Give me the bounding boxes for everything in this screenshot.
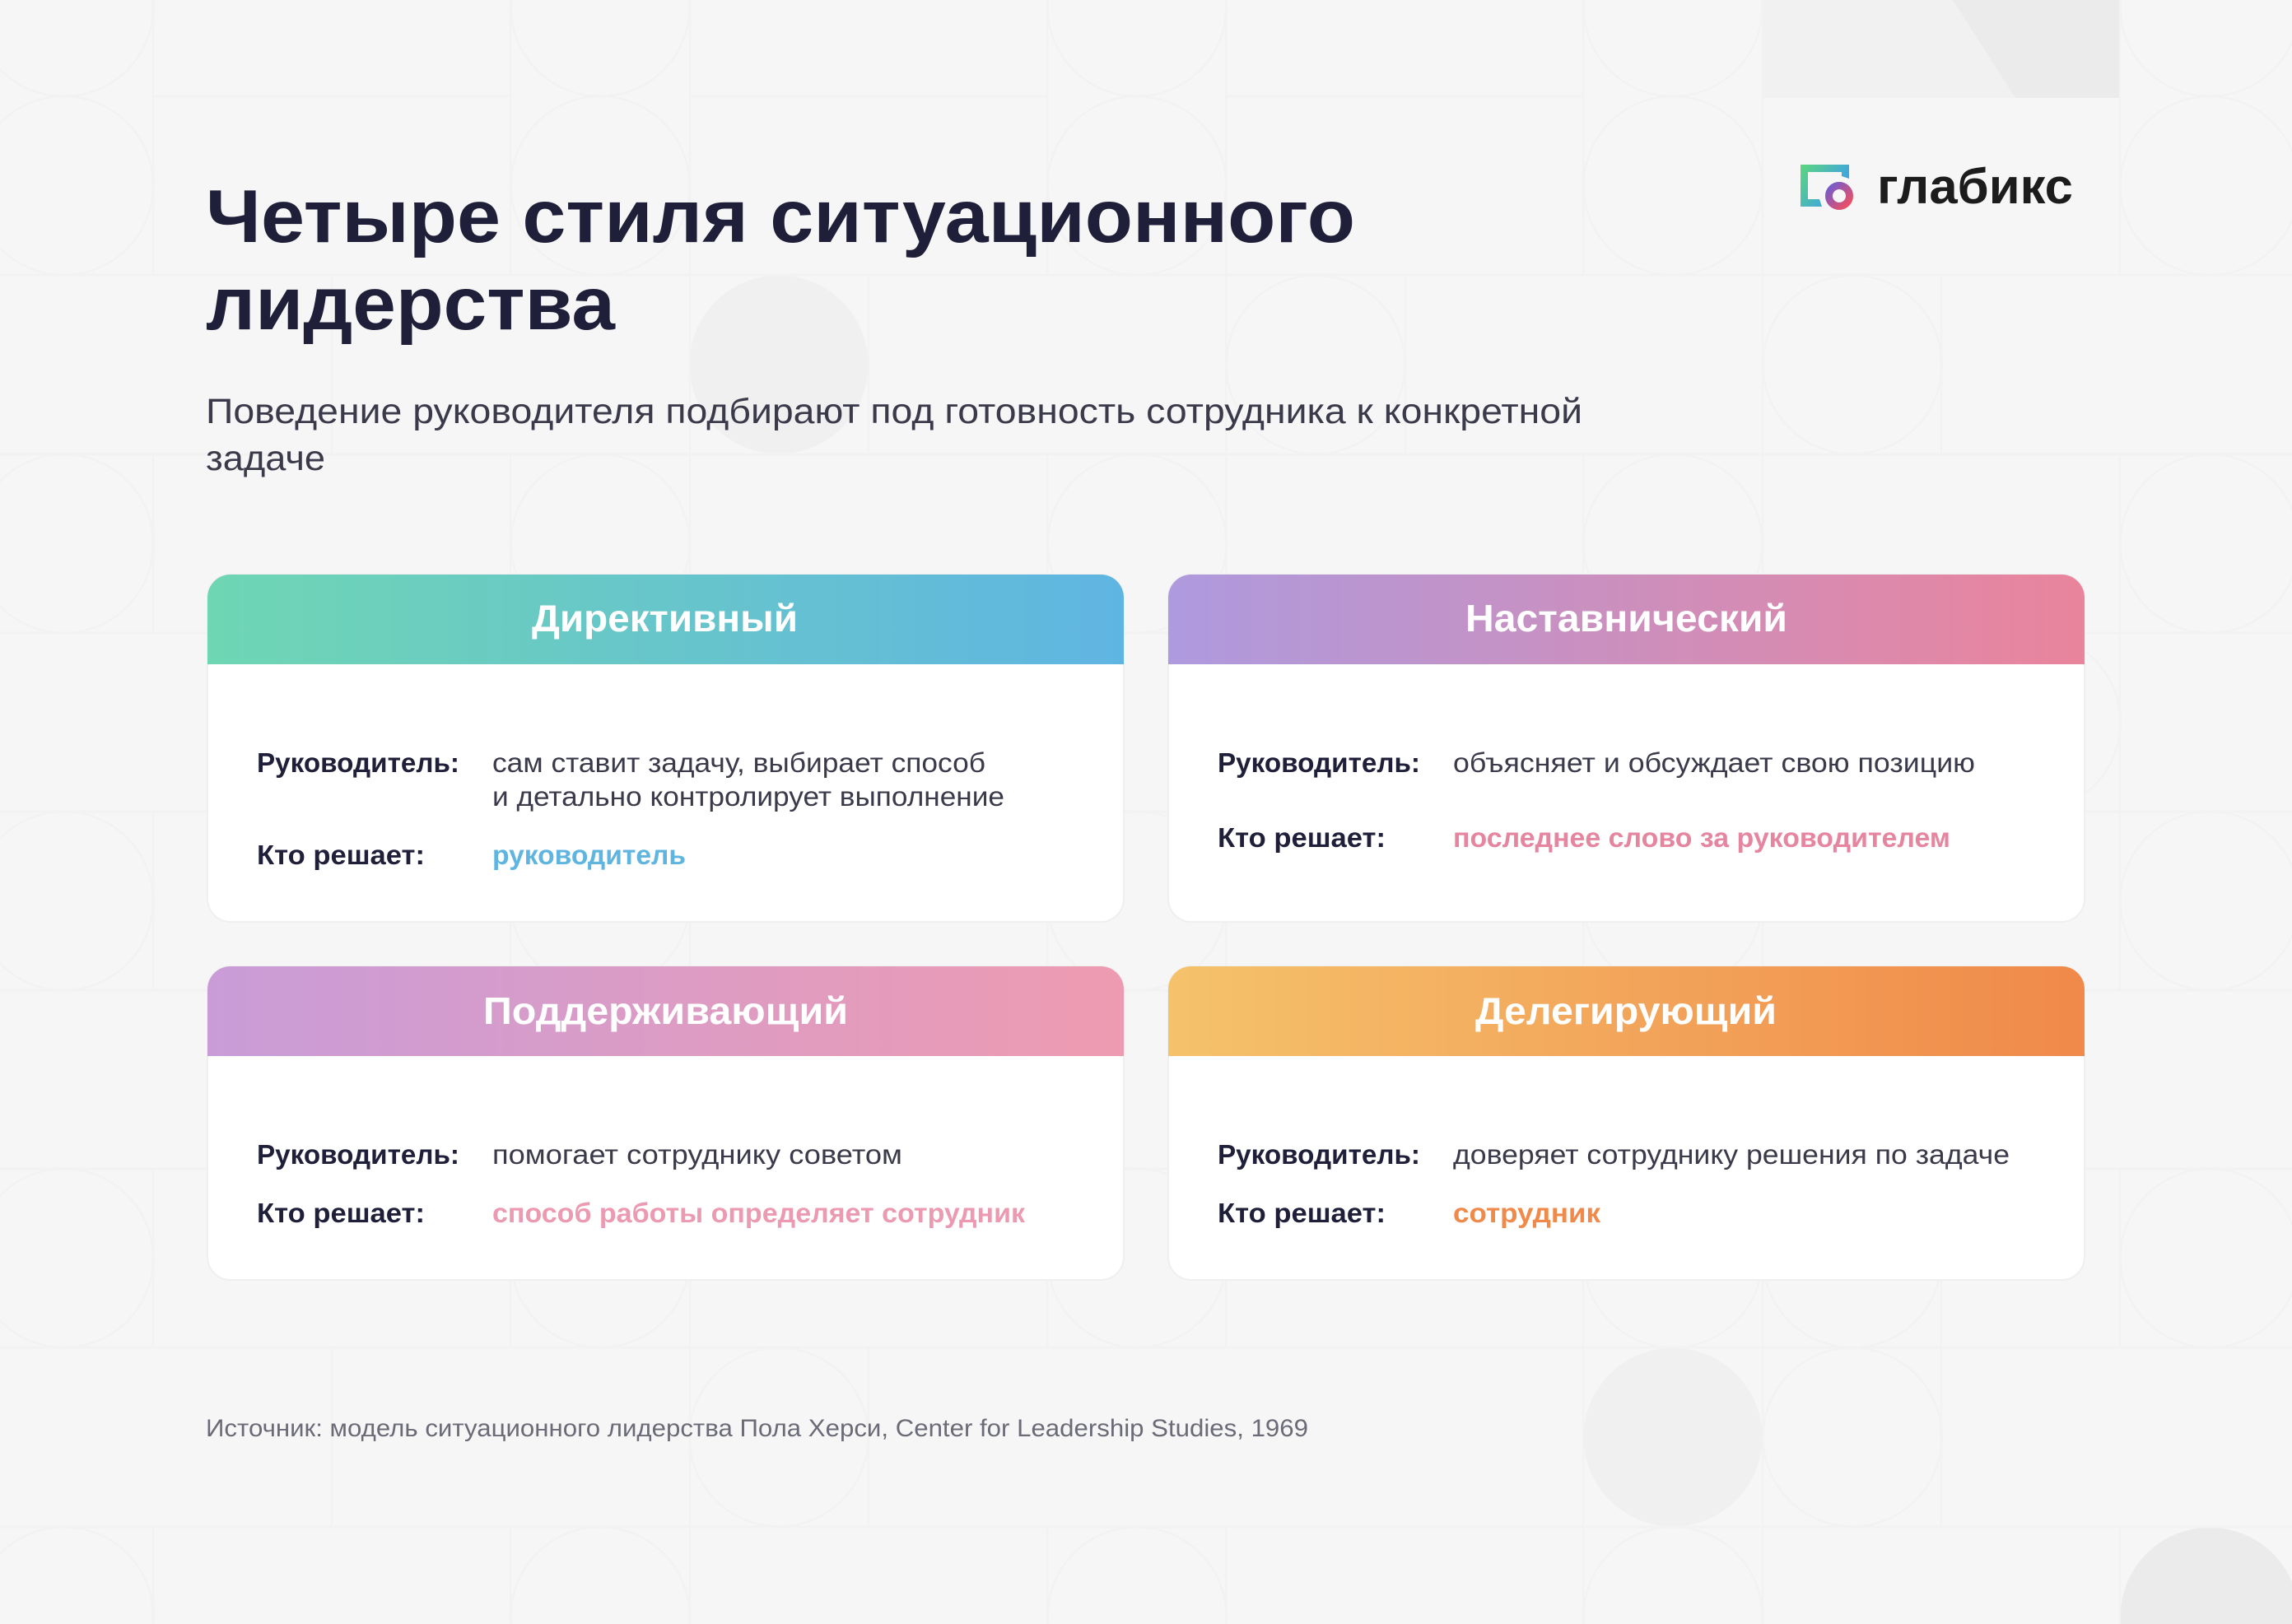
card heading: Делегирующий bbox=[1475, 989, 1777, 1032]
row: руководитель: Руководитель: bbox=[257, 747, 459, 778]
title: Четыре стиля ситуационного bbox=[206, 175, 1355, 258]
card heading: Поддерживающий bbox=[483, 989, 848, 1032]
row: кто решает: Кто решает: bbox=[257, 1198, 425, 1228]
row: руководитель: сам ставит задачу, выбирает способ bbox=[492, 747, 985, 778]
row: руководитель bbox=[257, 1139, 902, 1170]
row: руководитель: объясняет и обсуждает свою позицию bbox=[1453, 747, 1975, 778]
card header bbox=[207, 575, 1124, 664]
logo wordmark: глабикс bbox=[1877, 159, 2073, 214]
row: кто решает: Кто решает: bbox=[1218, 822, 1386, 853]
row: руководитель: Руководитель: bbox=[257, 1139, 459, 1170]
icon: logo mark bbox=[1801, 165, 1849, 207]
panel: Наставнический bbox=[1168, 575, 2085, 922]
row: кто решает: Кто решает: bbox=[1218, 1198, 1386, 1228]
row: руководитель: Руководитель: bbox=[1218, 747, 1420, 778]
row: руководитель: доверяет сотруднику решения по задаче bbox=[1453, 1139, 2010, 1170]
source footnote: Источник: модель ситуационного лидерства Пола Херси, Center for Leadership Studies, 1969 bbox=[206, 1415, 1308, 1442]
logo bbox=[1801, 159, 2073, 214]
row: руководитель: и детально контролирует выполнение bbox=[492, 781, 1004, 812]
title: лидерства bbox=[206, 263, 616, 346]
row: кто решает: способ работы определяет сотрудник bbox=[492, 1198, 1025, 1228]
subtitle: задаче bbox=[206, 439, 325, 478]
row: кто решает: Кто решает: bbox=[257, 840, 425, 870]
row: руководитель: помогает сотруднику советом bbox=[492, 1139, 902, 1170]
subtitle bbox=[206, 392, 1582, 478]
row: кто решает: последнее слово за руководителем bbox=[1453, 822, 1950, 853]
row: руководитель bbox=[1218, 1139, 2010, 1170]
title bbox=[206, 175, 1355, 346]
row: кто решает bbox=[257, 1198, 1025, 1228]
row: кто решает bbox=[1218, 1198, 1601, 1228]
row: кто решает: руководитель bbox=[492, 840, 686, 870]
panel: Директивный bbox=[207, 575, 1124, 922]
row: руководитель bbox=[257, 747, 1004, 812]
subtitle: Поведение руководителя подбирают под готовность сотрудника к конкретной bbox=[206, 392, 1582, 431]
row: кто решает bbox=[1218, 822, 1950, 853]
card header bbox=[1168, 575, 2085, 664]
row: руководитель bbox=[1218, 747, 1975, 778]
card header bbox=[1168, 966, 2085, 1056]
card header bbox=[207, 966, 1124, 1056]
row: руководитель: Руководитель: bbox=[1218, 1139, 1420, 1170]
panel: Делегирующий bbox=[1168, 966, 2085, 1280]
card heading: Директивный bbox=[532, 597, 798, 640]
card heading: Наставнический bbox=[1465, 597, 1787, 640]
row: кто решает: сотрудник bbox=[1453, 1198, 1601, 1228]
panel: Поддерживающий bbox=[207, 966, 1124, 1280]
row: кто решает bbox=[257, 840, 686, 870]
